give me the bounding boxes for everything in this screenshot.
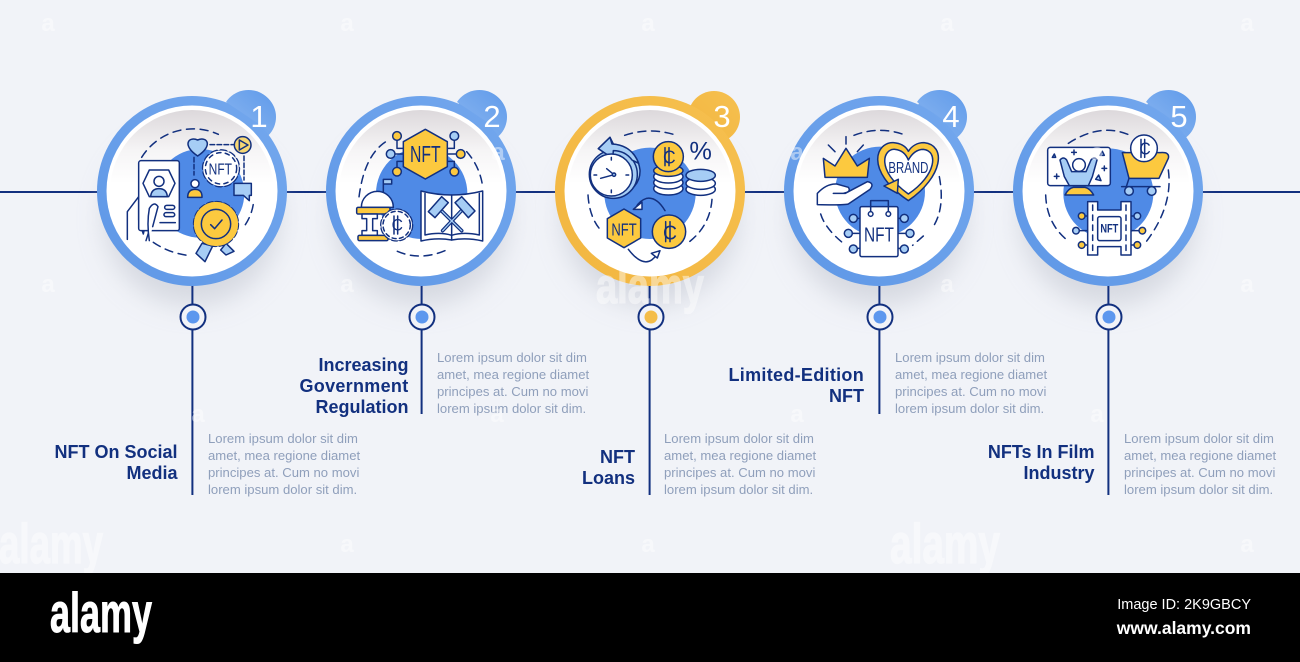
heading 4: Limited-Edition	[729, 365, 864, 385]
heading 2: Increasing	[318, 355, 408, 375]
drop shadow 5	[1020, 130, 1196, 306]
body text 4: lorem ipsum dolor sit dim.	[895, 401, 1044, 416]
body text 2: principes at. Cum no movi	[437, 384, 588, 399]
body text 1: lorem ipsum dolor sit dim.	[208, 482, 357, 497]
body text 4: amet, mea regione diamet	[895, 367, 1047, 382]
icon: government regulation: NFT	[410, 141, 441, 167]
body text 4: principes at. Cum no movi	[895, 384, 1046, 399]
disc 4	[794, 106, 964, 276]
website: www.alamy.com	[1116, 618, 1251, 638]
panel: step 2	[299, 90, 589, 417]
connector 2	[410, 284, 434, 414]
icon: social media NFT: NFT	[209, 161, 232, 178]
watermarks: a	[491, 139, 505, 166]
body text 5: Lorem ipsum dolor sit dim	[1124, 431, 1274, 446]
watermarks: a	[41, 271, 55, 298]
watermarks: a	[340, 531, 354, 558]
heading 3: NFT	[600, 447, 635, 467]
icon: limited edition brand: BRAND	[888, 160, 928, 177]
body text 2: amet, mea regione diamet	[437, 367, 589, 382]
body text 1: principes at. Cum no movi	[208, 465, 359, 480]
watermarks: a	[790, 139, 804, 166]
number badge 1	[97, 90, 287, 286]
watermarks: a	[790, 401, 804, 428]
heading 2: Government	[299, 376, 408, 396]
footer bar	[0, 573, 1300, 662]
body text 4: Lorem ipsum dolor sit dim	[895, 350, 1045, 365]
number badge 2: 2	[483, 99, 501, 134]
panel: step 4	[729, 90, 1047, 416]
number badge 4: 4	[942, 99, 960, 134]
drop shadow 1	[104, 130, 280, 306]
heading 5: Industry	[1023, 463, 1094, 483]
icon: social media NFT	[127, 129, 253, 262]
connector 4	[868, 284, 892, 414]
watermarks: alamy	[0, 512, 103, 575]
disc 3	[564, 106, 736, 276]
watermarks: a	[1240, 10, 1254, 37]
watermarks: a	[340, 271, 354, 298]
icon: NFT loans: NFT	[611, 219, 637, 239]
drop shadow 2	[333, 130, 509, 306]
watermarks: a	[1240, 531, 1254, 558]
watermarks: a	[641, 531, 655, 558]
watermarks: a	[340, 10, 354, 37]
number badge 3: 3	[713, 99, 731, 134]
panel: step 3	[555, 91, 816, 497]
icon: government regulation	[357, 129, 483, 256]
icon: NFTs in film: NFT	[1100, 222, 1119, 236]
disc 2	[336, 106, 506, 276]
icon: NFT loans: C	[663, 146, 676, 167]
body text 2: Lorem ipsum dolor sit dim	[437, 350, 587, 365]
heading 5: NFTs In Film	[988, 442, 1094, 462]
body text 5: lorem ipsum dolor sit dim.	[1124, 482, 1273, 497]
watermarks: alamy	[890, 512, 1000, 575]
watermarks: a	[940, 271, 954, 298]
watermarks: a	[490, 401, 504, 428]
watermarks: a	[1090, 401, 1104, 428]
icon: NFT loans: %	[689, 137, 712, 165]
heading 1: Media	[126, 463, 178, 483]
number badge 2	[326, 90, 516, 286]
icon: NFTs in film	[1046, 130, 1169, 255]
number badge 4	[784, 90, 974, 286]
body text 3: amet, mea regione diamet	[664, 448, 816, 463]
connector 5	[1096, 284, 1122, 495]
number badge 3	[555, 91, 745, 286]
horizontal timeline	[0, 191, 1300, 193]
body text 3: Lorem ipsum dolor sit dim	[664, 431, 814, 446]
drop shadow 3	[562, 130, 738, 306]
icon: limited edition brand	[817, 130, 941, 257]
watermarks: alamy	[596, 258, 704, 314]
icon: NFT loans: C	[663, 221, 677, 244]
icon: limited edition brand: NFT	[864, 223, 894, 246]
body text 2: lorem ipsum dolor sit dim.	[437, 401, 586, 416]
footer logo: alamy	[50, 581, 152, 644]
drop shadow 4	[791, 130, 967, 306]
heading 2: Regulation	[316, 397, 408, 417]
icon: NFT loans	[588, 131, 715, 262]
disc 1	[106, 106, 278, 276]
number badge 5	[1013, 90, 1203, 286]
heading 1: NFT On Social	[54, 442, 178, 462]
panel: step 5	[988, 90, 1276, 497]
number badge 1: 1	[250, 99, 268, 134]
number badge 5: 5	[1170, 99, 1188, 134]
body text 3: principes at. Cum no movi	[664, 465, 815, 480]
body text 5: principes at. Cum no movi	[1124, 465, 1275, 480]
watermarks: a	[1240, 271, 1254, 298]
watermarks: a	[940, 10, 954, 37]
heading 4: NFT	[829, 386, 864, 406]
connector 1	[180, 284, 206, 495]
watermarks: a	[41, 10, 55, 37]
watermarks: a	[641, 10, 655, 37]
image id: Image ID: 2K9GBCY	[1117, 597, 1251, 613]
icon: NFTs in film: C	[1139, 139, 1151, 159]
body text 1: Lorem ipsum dolor sit dim	[208, 431, 358, 446]
body text 3: lorem ipsum dolor sit dim.	[664, 482, 813, 497]
body text 1: amet, mea regione diamet	[208, 448, 360, 463]
heading 3: Loans	[582, 468, 635, 488]
body text 5: amet, mea regione diamet	[1124, 448, 1276, 463]
disc 5	[1022, 106, 1194, 276]
icon: government regulation: C	[392, 216, 403, 235]
watermarks: a	[191, 401, 205, 428]
watermarks: a	[1090, 139, 1104, 166]
panel: step 1	[54, 90, 360, 497]
connector 3	[638, 284, 664, 495]
